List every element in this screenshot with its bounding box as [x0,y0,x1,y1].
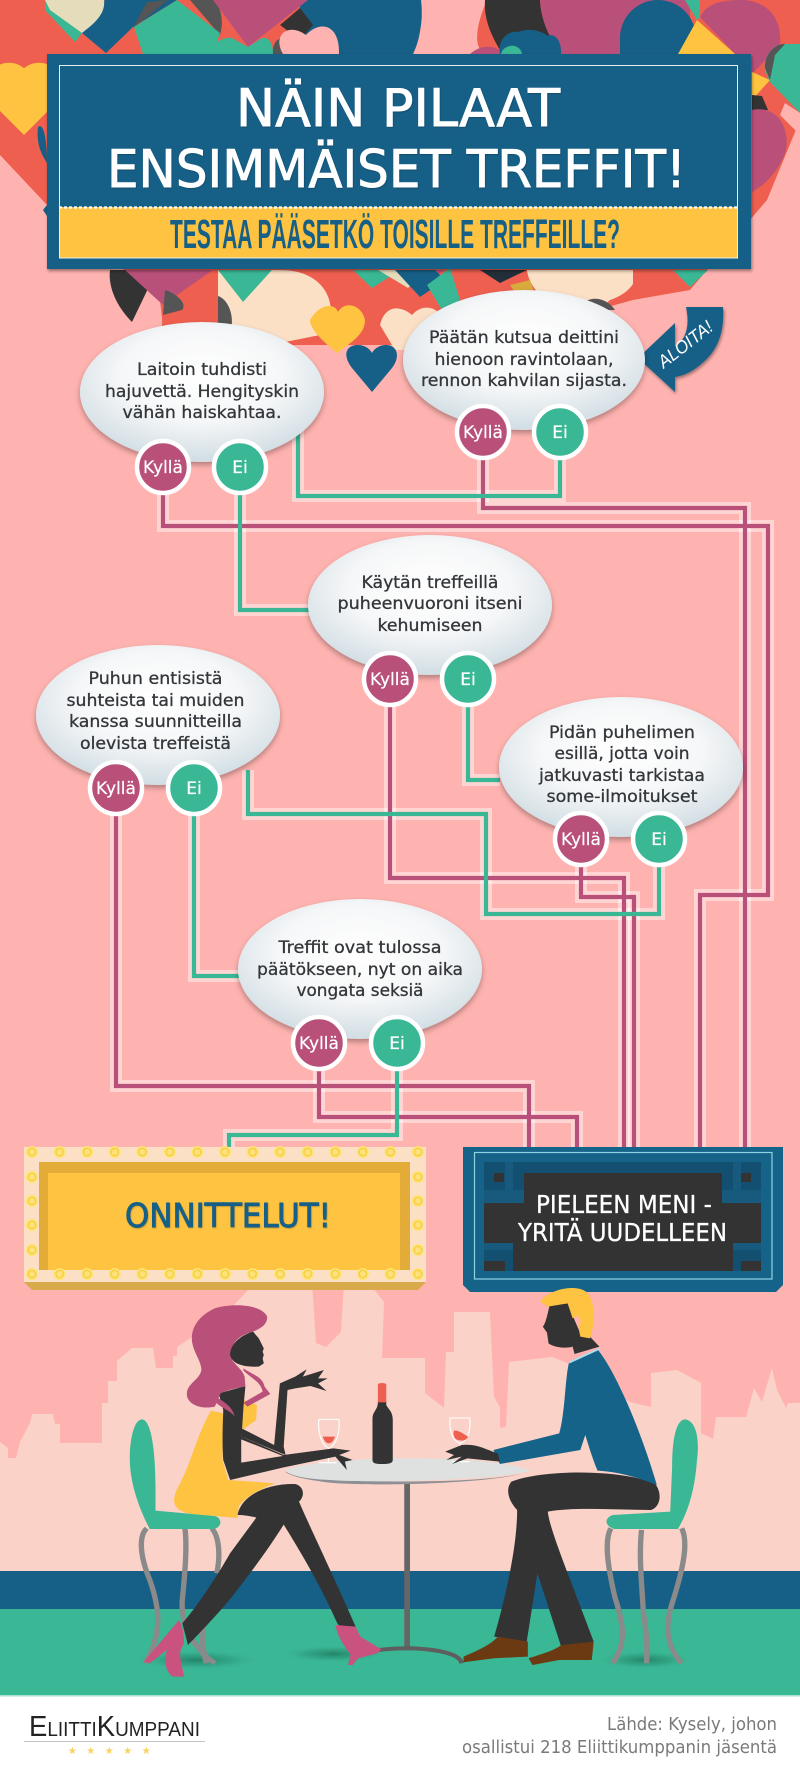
green no lines [194,430,659,1147]
yes button [90,762,142,814]
no button [214,441,266,493]
halo under connector lines [116,430,768,1147]
question: entiset suhteet [36,645,280,814]
question: kehuminen: Käytän treffeillä [362,573,498,593]
question: ravintola [403,290,645,458]
no button: Ei [552,423,568,443]
floor [0,1571,800,1696]
question: kehuminen: kehumiseen [378,616,482,636]
no button [168,762,220,814]
no button: Ei [460,670,476,690]
source note [462,1714,777,1758]
no button: Ei [232,458,248,478]
question: seksi: vongata seksiä [296,981,424,1001]
result: pieleen meni sign: PIELEEN MENI - [536,1190,712,1219]
yes button: Kyllä [561,830,601,850]
no button: Ei [651,830,667,850]
yes button: Kyllä [299,1034,339,1054]
question: puhelin: some-ilmoitukset [546,787,698,807]
yes button: Kyllä [143,458,183,478]
result: pieleen meni sign: YRITÄ UUDELLEEN [517,1218,727,1247]
no button [371,1017,423,1069]
table [285,1458,531,1663]
yes button: Kyllä [463,423,503,443]
question: seksi [238,899,482,1069]
question: seksi: päätökseen, nyt on aika [257,960,463,980]
result: onnittelut marquee [24,1146,426,1290]
no button [534,406,586,458]
result: onnittelut marquee: ONNITTELUT! [125,1196,331,1235]
title: NÄIN PILAAT [236,78,560,139]
no button: Ei [186,779,202,799]
yes button [293,1017,345,1069]
wine bottle [372,1383,393,1464]
result: pieleen meni sign [463,1147,783,1292]
no button [442,653,494,705]
question: seksi: Treffit ovat tulossa [277,938,442,958]
yes button [457,406,509,458]
man [445,1288,660,1665]
question: kehuminen [308,535,552,705]
hearts cluster behind the header [0,0,800,353]
question: entiset suhteet: Puhun entisistä [88,669,222,689]
logo: ELIITTIKUMPPANI [29,1711,200,1743]
source note: osallistui 218 Eliittikumppanin jäsentä [462,1737,777,1758]
question: puhelin: jatkuvasti tarkistaa [538,766,705,786]
arrow: aloita: ALOITA! [653,317,717,372]
marquee bulbs [26,1146,424,1280]
left chair [130,1419,220,1663]
question: puhelin [499,697,743,865]
no button: Ei [389,1034,405,1054]
question: entiset suhteet: olevista treffeistä [80,734,231,754]
yes button [364,653,416,705]
question: hajuvesi: vähän haiskahtaa. [122,403,282,423]
wine glass right [450,1418,470,1462]
subtitle band [59,207,738,258]
icon: navy heart [346,345,397,392]
floor shadows [134,1645,693,1670]
woman [144,1305,381,1677]
title [107,78,686,200]
flow connector lines [116,430,768,1147]
logo: ★★★★★ [68,1746,160,1757]
title: ENSIMMÄISET TREFFIT! [107,139,686,200]
question: ravintola: Päätän kutsua deittini [429,328,619,348]
question: hajuvesi: hajuvettä. Hengityskin [105,382,299,402]
question: entiset suhteet: kanssa suunnitteilla [69,712,242,732]
skyline [0,1282,800,1575]
yes button: Kyllä [96,779,136,799]
question: puhelin: esillä, jotta voin [554,744,690,764]
source note: Lähde: Kysely, johon [607,1714,777,1735]
question: hajuvesi: Laitoin tuhdisti [137,360,267,380]
logo [24,1711,205,1757]
pink yes lines [116,450,768,1147]
arrow: aloita [638,307,723,392]
yes button [137,441,189,493]
date scene illustration [130,1288,698,1677]
question: ravintola: rennon kahvilan sijasta. [421,371,627,391]
footer panel [0,1695,800,1777]
question: puhelin: Pidän puhelimen [549,723,695,743]
question: entiset suhteet: suhteista tai muiden [66,691,244,711]
yes button: Kyllä [370,670,410,690]
yes button [555,813,607,865]
question: kehuminen: puheenvuoroni itseni [338,594,522,614]
header panel [47,54,751,269]
wine glass left [319,1419,339,1463]
question: ravintola: hienoon ravintolaan, [434,350,614,370]
no button [633,813,685,865]
right chair [607,1419,698,1663]
question: hajuvesi [80,322,324,493]
